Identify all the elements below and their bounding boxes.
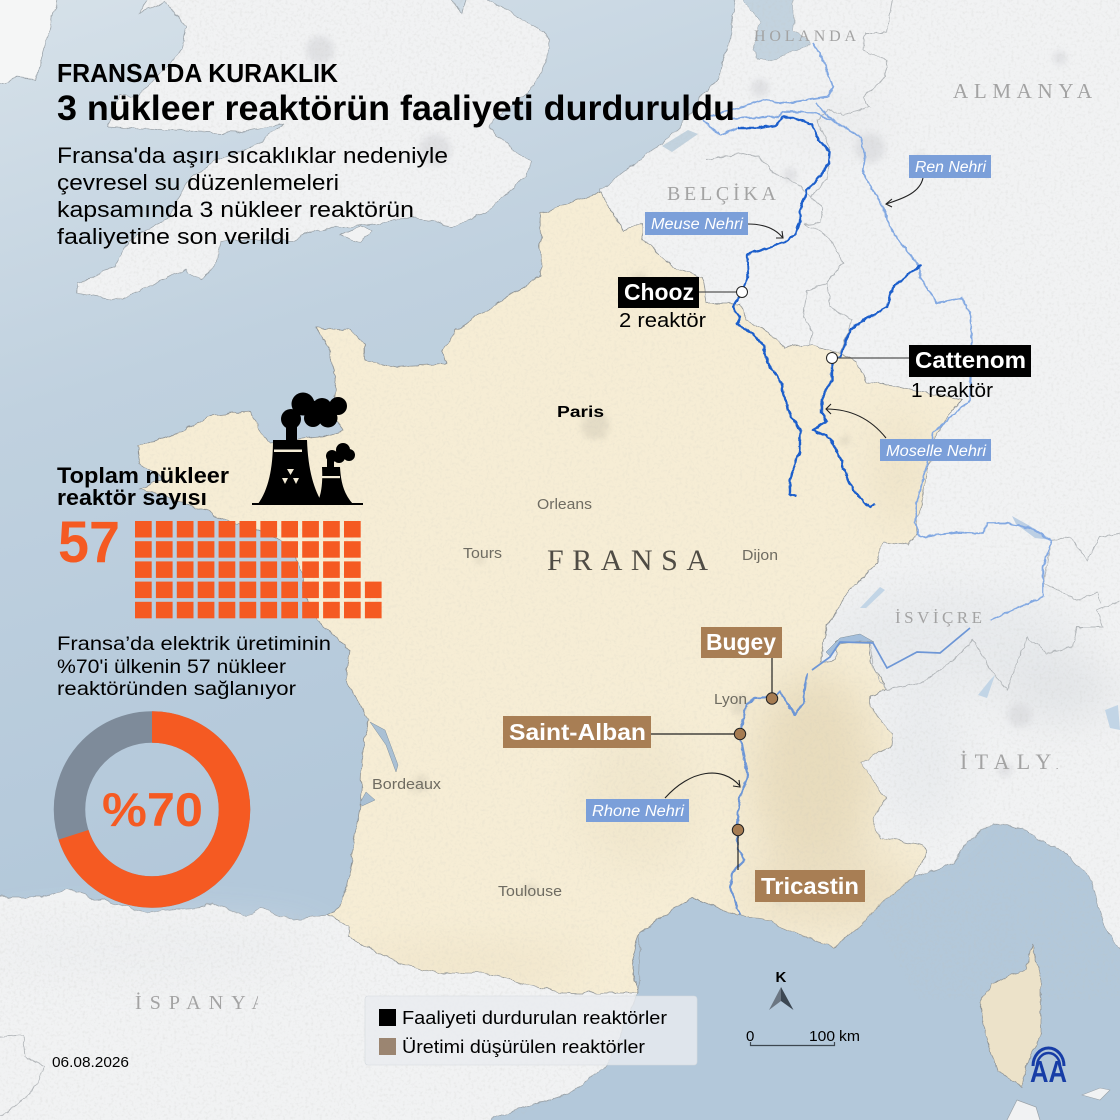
paper grain: [148, 220, 944, 984]
small cooling tower: [317, 467, 353, 504]
sea: IJsselmeer: [743, 0, 810, 63]
Cattenom marker: [826, 352, 838, 364]
heading: total reactors: [57, 463, 229, 510]
label: Almanya: ALMANYA: [953, 79, 1093, 103]
river tag: Meuse: Meuse Nehri: [651, 216, 744, 233]
country labels: [135, 28, 1093, 1014]
donut value: %70: [102, 783, 203, 836]
description: [57, 143, 448, 249]
title block: [57, 58, 735, 249]
Saint-Alban label: [503, 716, 651, 748]
relief shading: Alps, Massif Central, Pyrenees: [350, 410, 925, 977]
sea: Dutch delta: [662, 130, 698, 152]
city blotches outside France: [306, 36, 1067, 777]
text: electricity share: reaktöründen sağlanıyor: [57, 678, 297, 700]
land: Ireland: [0, 0, 60, 90]
Cattenom label: [909, 345, 1031, 377]
city: Dijon: Dijon: [742, 548, 778, 564]
text: electricity share: %70'i ülkenin 57 nükleer: [57, 656, 287, 678]
text: electricity share: [57, 633, 331, 700]
Cattenom count: 1 reaktör: [911, 380, 993, 402]
big tower smoke: [281, 392, 347, 441]
Chooz count: 2 reaktör: [619, 310, 706, 332]
reactor: Chooz: Chooz: [624, 279, 694, 305]
river tag: Meuse: [645, 212, 748, 235]
Tricastin marker: [732, 824, 744, 836]
Lake Garda: [1105, 705, 1120, 730]
reactor: Cattenom: [826, 345, 1031, 402]
scale bar: 100: [809, 1028, 835, 1045]
Lake Geneva: [826, 634, 874, 656]
arrow: Meuse: [748, 224, 783, 238]
icon: nuclear power plant: [252, 392, 363, 505]
scale bar: km: [839, 1028, 860, 1045]
reactor: Bugey: [701, 627, 782, 704]
Saint-Alban marker: [734, 728, 746, 740]
legend: [365, 996, 697, 1065]
scale bar: [746, 1028, 860, 1046]
label: Ispanya: İSPANYA: [135, 991, 267, 1014]
land: Corsica: [980, 945, 1041, 1087]
number: 57: 57: [58, 510, 120, 575]
Tricastin label: [755, 870, 865, 902]
legend: halted reactors: Faaliyeti durdurulan reaktörler: [402, 1007, 667, 1028]
description: kapsamında 3 nükleer reaktörün: [57, 197, 414, 222]
heading: total reactors: reaktör sayısı: [57, 485, 207, 510]
legend: reduced output reactors: Üretimi düşürülen reaktörler: [402, 1036, 645, 1057]
north arrow: [769, 969, 794, 1010]
label: Isviçre: İSVİÇRE: [895, 608, 982, 627]
France land fill: [137, 193, 962, 993]
radiation symbol: [282, 469, 299, 484]
city labels: [372, 404, 778, 900]
sea: Ligurian basin over Italy: [470, 822, 1120, 1120]
land: Isle of Wight: [340, 226, 372, 243]
logo: AA: AA: [1030, 1054, 1067, 1089]
city: Paris: Paris: [557, 404, 604, 421]
land: Sardinia tip: [997, 1100, 1046, 1120]
river: Moselle: [813, 265, 922, 507]
land: Great Britain: [79, 0, 549, 300]
reactor: Saint-Alban: [503, 716, 746, 748]
river tag: Ren: Ren Nehri: [915, 159, 987, 176]
label: Belçika: BELÇİKA: [667, 182, 777, 205]
kicker: FRANSA'DA KURAKLIK: [57, 58, 338, 88]
Lake Neuchatel: [860, 587, 885, 608]
description: Fransa'da aşırı sıcaklıklar nedeniyle: [57, 143, 448, 168]
description: faaliyetine son verildi: [57, 224, 290, 249]
Lake Constance: [1012, 516, 1052, 540]
map: France: [130, 190, 970, 1000]
label: Fransa: FRANSA: [547, 544, 708, 577]
river tag: Ren: [909, 155, 991, 178]
arrow: Ren: [886, 178, 923, 207]
river: Rhone: [730, 673, 807, 915]
reactor: Tricastin: [732, 824, 865, 902]
Arcachon basin: [360, 792, 375, 806]
main title: 3 nükleer reaktörün faaliyeti durduruldu: [57, 89, 735, 128]
Bugey label: [701, 627, 782, 658]
label: Holanda: HOLANDA: [754, 28, 856, 45]
land: north-east Europe: [600, 0, 1120, 1000]
reactor: Cattenom: Cattenom: [915, 347, 1026, 373]
river tag: Rhone: [586, 799, 689, 822]
donut chart: 70 percent: [70, 727, 234, 892]
reactor: Chooz: [618, 277, 748, 332]
city: Tours: Tours: [463, 546, 502, 562]
city: Toulouse: Toulouse: [498, 884, 562, 900]
reactor: Saint-Alban: Saint-Alban: [509, 719, 646, 745]
river: Meuse: [733, 117, 830, 497]
city: Lyon: Lyon: [714, 692, 747, 708]
scale bar: 0: [746, 1028, 754, 1045]
big tower stripe: [274, 450, 302, 452]
pictogram: 57 reactor squares: [135, 521, 382, 618]
big cooling tower: [258, 440, 323, 504]
river tag: Rhone: Rhone Nehri: [592, 803, 685, 820]
river tag: Moselle: [880, 439, 991, 461]
reactor: Tricastin: Tricastin: [761, 873, 859, 899]
river tag: Moselle: Moselle Nehri: [886, 443, 987, 460]
donut remainder: [70, 727, 234, 892]
city: Bordeaux: Bordeaux: [372, 777, 442, 793]
estuaries and lakes: [360, 516, 1120, 806]
river: Rhine: [703, 43, 1052, 620]
small tower stripe: [322, 476, 340, 478]
donut share: [70, 727, 234, 892]
label: Italya: İTALYA: [960, 749, 1072, 774]
text: electricity share: Fransa’da elektrik üretiminin: [57, 633, 331, 655]
land: Sardinia: [997, 1100, 1046, 1120]
arrow: Rhone: [665, 773, 740, 798]
hill shading outside France: [0, 109, 1120, 972]
ground line: [252, 503, 363, 505]
river: upper Rhone in Switzerland: [812, 628, 970, 670]
heading: total reactors: Toplam nükleer: [57, 463, 229, 488]
land: Spain: [0, 890, 639, 1120]
land: Elba: [1082, 1088, 1110, 1100]
Bugey marker: [766, 693, 778, 704]
small tower smoke: [326, 443, 355, 468]
date: 06.08.2026: [52, 1055, 129, 1071]
north arrow: K: [776, 969, 786, 986]
Chooz marker: [736, 286, 748, 298]
Lake Maggiore: [978, 675, 995, 698]
Gironde estuary: [370, 722, 398, 772]
Chooz label: [618, 277, 699, 308]
city: Orleans: Orleans: [537, 497, 592, 513]
arrow: Moselle: [826, 404, 886, 438]
description: çevresel su düzenlemeleri: [57, 170, 339, 195]
city blotches in France: [411, 272, 851, 907]
reactor: Bugey: Bugey: [706, 629, 776, 655]
